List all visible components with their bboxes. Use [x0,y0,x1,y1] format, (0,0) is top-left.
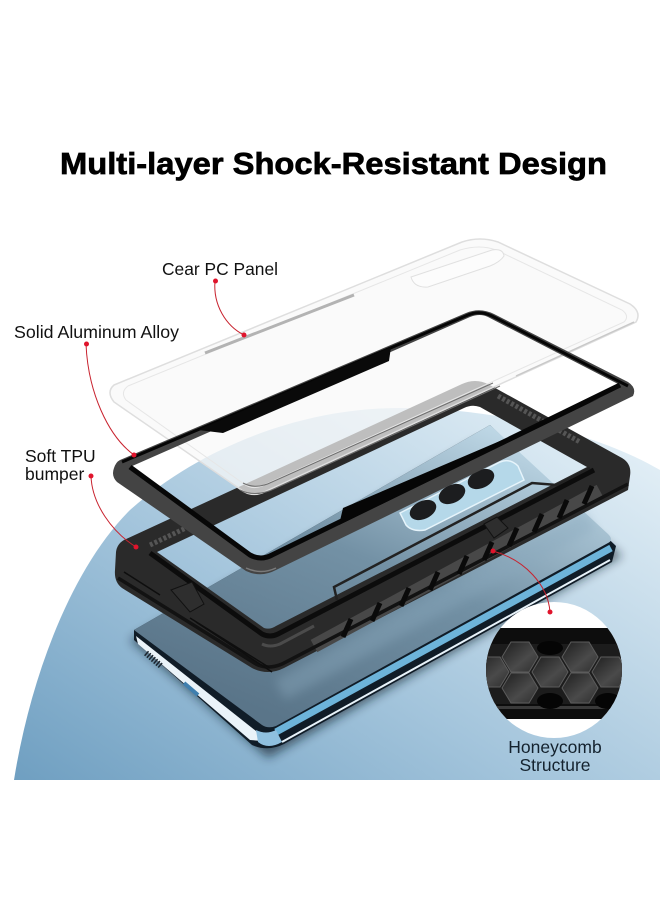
phone base edge [134,425,616,748]
camera cut-out [411,250,504,287]
honeycomb imprint [280,520,590,690]
lower left grooves [124,572,272,672]
phone silver edge [282,560,610,742]
solid aluminum frame [113,310,634,574]
leader: aluminum [84,342,136,458]
frame upper black edge [122,313,628,462]
label: solid aluminum alloy: Solid Aluminum Alloy [14,322,179,342]
bumper clip [484,517,508,538]
honeycomb callout [486,602,622,738]
side button clip [171,582,204,612]
bumper shell [115,381,630,672]
clear PC panel [110,239,638,494]
bumper inner rail [150,470,594,636]
phone blue rim [276,548,611,732]
leader: honeycomb [490,548,552,614]
rib band [314,491,600,646]
upper black inlay [198,347,391,433]
label: soft TPU bumper: bumper [25,464,85,484]
title: Multi-layer Shock-Resistant Design [60,146,607,181]
bumper ribs [343,486,592,637]
infographic [14,152,660,780]
camera module [400,461,524,530]
charging port [184,683,198,695]
panel body [110,239,638,494]
inner stepped line [334,468,590,600]
label: honeycomb structure: Structure [520,755,590,775]
lower black inner edge [130,385,620,558]
phone shadow [130,440,622,758]
leader: bumper [88,474,138,550]
phone corner [256,730,282,746]
phone [130,425,622,758]
label: honeycomb structure: Honeycomb [508,737,602,757]
lower black inlay [339,398,600,525]
lower edge lines [240,383,500,494]
soft TPU bumper [115,381,630,672]
bumper outer rail [118,484,628,667]
bottom corner highlight [246,568,276,572]
frame body [113,310,634,574]
callout circle [486,602,622,738]
panel inner outline [123,247,627,488]
leader: clear panel [213,278,246,338]
top honeycomb edge [150,396,580,545]
speaker grille [146,653,161,666]
honeycomb texture [486,628,622,719]
rail highlight [262,626,314,646]
label: soft TPU bumper: Soft TPU [25,446,96,466]
phone side band [136,636,262,741]
phone back [134,425,611,727]
side slot [205,295,354,353]
label: clear PC panel: Cear PC Panel [162,259,278,279]
background blue arc [14,408,660,780]
